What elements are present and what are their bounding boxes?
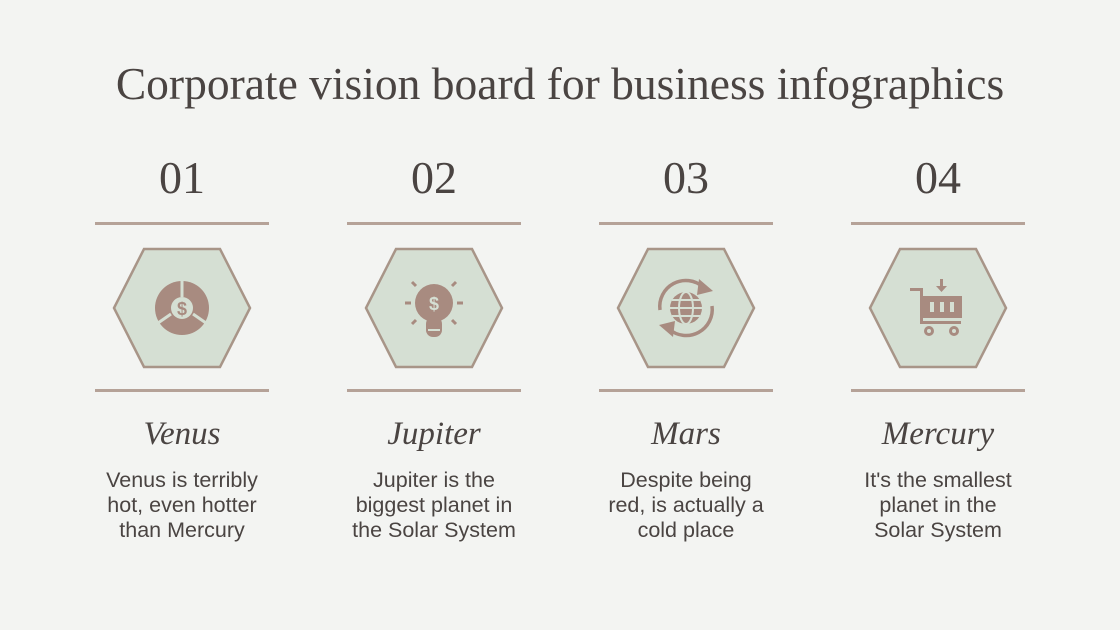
name: Venus: [144, 416, 220, 452]
panel: 04 Mercury: [851, 152, 1025, 542]
description: [608, 468, 764, 542]
icon: shopping cart in hexagon: [868, 248, 1008, 368]
description: [106, 468, 258, 542]
number 04: 04: [915, 152, 961, 203]
description: [864, 468, 1012, 542]
icon: pie chart dollar in hexagon: $: [177, 299, 187, 319]
icon: light bulb dollar in hexagon: [364, 248, 504, 368]
description: Venus is terribly: [106, 468, 258, 492]
description: It's the smallest: [864, 468, 1012, 492]
description: than Mercury: [119, 518, 245, 542]
description: Jupiter is the: [373, 468, 495, 492]
description: planet in the: [879, 493, 997, 517]
title: Corporate vision board for business infographics: [116, 58, 1004, 109]
number 01: 01: [159, 152, 205, 203]
description: cold place: [638, 518, 734, 542]
description: Solar System: [874, 518, 1002, 542]
number 02: 02: [411, 152, 457, 203]
description: biggest planet in: [356, 493, 512, 517]
icon: pie chart dollar in hexagon: [112, 248, 252, 368]
description: Despite being: [620, 468, 752, 492]
description: hot, even hotter: [107, 493, 257, 517]
description: red, is actually a: [608, 493, 764, 517]
panel: 03 Mars: [599, 152, 773, 542]
name: Jupiter: [387, 416, 481, 452]
panel: 01 Venus: [95, 152, 269, 542]
number 03: 03: [663, 152, 709, 203]
panel: 02 Jupiter: [347, 152, 521, 542]
description: [352, 468, 516, 542]
icon: globe with arrows in hexagon: [616, 248, 756, 368]
name: Mercury: [882, 416, 994, 452]
description: the Solar System: [352, 518, 516, 542]
icon: light bulb dollar in hexagon: $: [429, 294, 439, 314]
name: Mars: [651, 416, 721, 452]
